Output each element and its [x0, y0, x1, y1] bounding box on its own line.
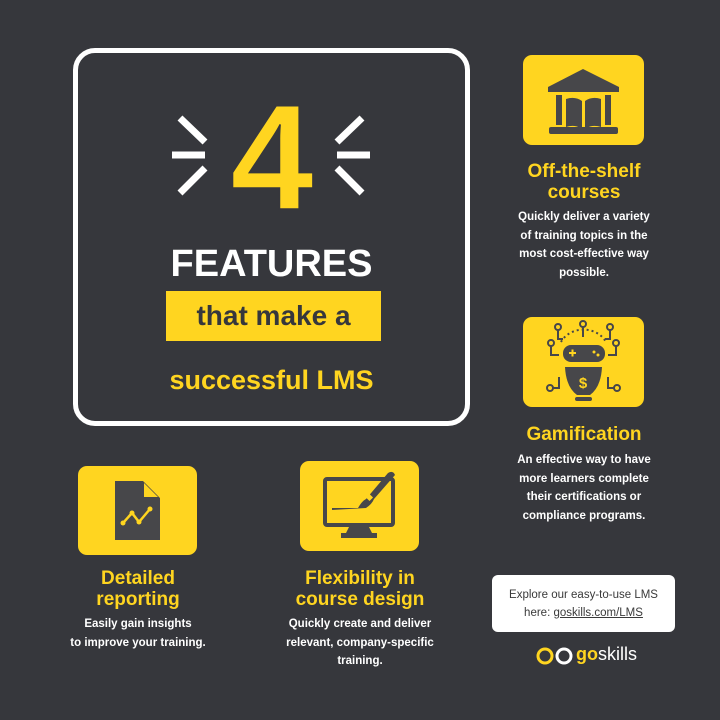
- CTA box: Explore our easy-to-use LMS: [509, 589, 658, 601]
- title: off-the-shelf: [528, 161, 640, 203]
- logo: goskills: [536, 644, 637, 664]
- body: off-the-shelf: [518, 211, 650, 278]
- title: off-the-shelf: courses: [548, 182, 620, 203]
- body: gamification: more learners complete: [519, 472, 649, 484]
- body: detailed reporting: to improve your training.: [70, 636, 206, 648]
- logo: goskills: go: [576, 644, 598, 664]
- subheading: successful LMS: [169, 365, 374, 395]
- body: off-the-shelf: possible.: [559, 266, 609, 278]
- CTA box: [492, 575, 675, 632]
- body: flexibility: Quickly create and deliver: [289, 618, 431, 630]
- title: flexibility: Flexibility in: [305, 568, 415, 589]
- body: detailed reporting: Easily gain insights: [84, 618, 192, 630]
- body: detailed reporting: [70, 618, 206, 648]
- body: flexibility: relevant, company-specific: [286, 636, 434, 648]
- title: flexibility: course design: [296, 589, 424, 610]
- body: gamification: [517, 454, 651, 522]
- icon: report: [78, 466, 197, 555]
- main panel: [73, 48, 470, 426]
- title: flexibility: [296, 568, 424, 610]
- title: detailed reporting: [96, 568, 180, 610]
- big number 4: 4: [230, 73, 314, 241]
- body: gamification: An effective way to have: [517, 454, 651, 466]
- highlight: that make a: [166, 291, 381, 341]
- title: off-the-shelf: Off-the-shelf: [528, 161, 640, 182]
- icon: gamification: [523, 317, 644, 407]
- title: detailed reporting: reporting: [96, 589, 180, 610]
- body: off-the-shelf: of training topics in the: [520, 230, 648, 242]
- title: gamification: Gamification: [526, 424, 642, 445]
- icon: gamification: $: [579, 375, 588, 392]
- body: off-the-shelf: most cost-effective way: [519, 248, 649, 260]
- body: off-the-shelf: Quickly deliver a variety: [518, 211, 650, 223]
- body: gamification: their certifications or: [527, 491, 641, 503]
- body: flexibility: [286, 618, 434, 667]
- bursts: [172, 116, 370, 196]
- title: detailed reporting: Detailed: [101, 568, 175, 589]
- icon: library: [523, 55, 644, 145]
- body: flexibility: training.: [337, 655, 383, 667]
- heading FEATURES: FEATURES: [171, 243, 372, 285]
- icon: monitor with brush: [300, 461, 419, 551]
- highlight: that make a: that make a: [196, 300, 351, 331]
- CTA box: here: goskills.com/LMS: [524, 607, 643, 619]
- logo: goskills: skills: [598, 644, 637, 664]
- body: gamification: compliance programs.: [523, 510, 645, 522]
